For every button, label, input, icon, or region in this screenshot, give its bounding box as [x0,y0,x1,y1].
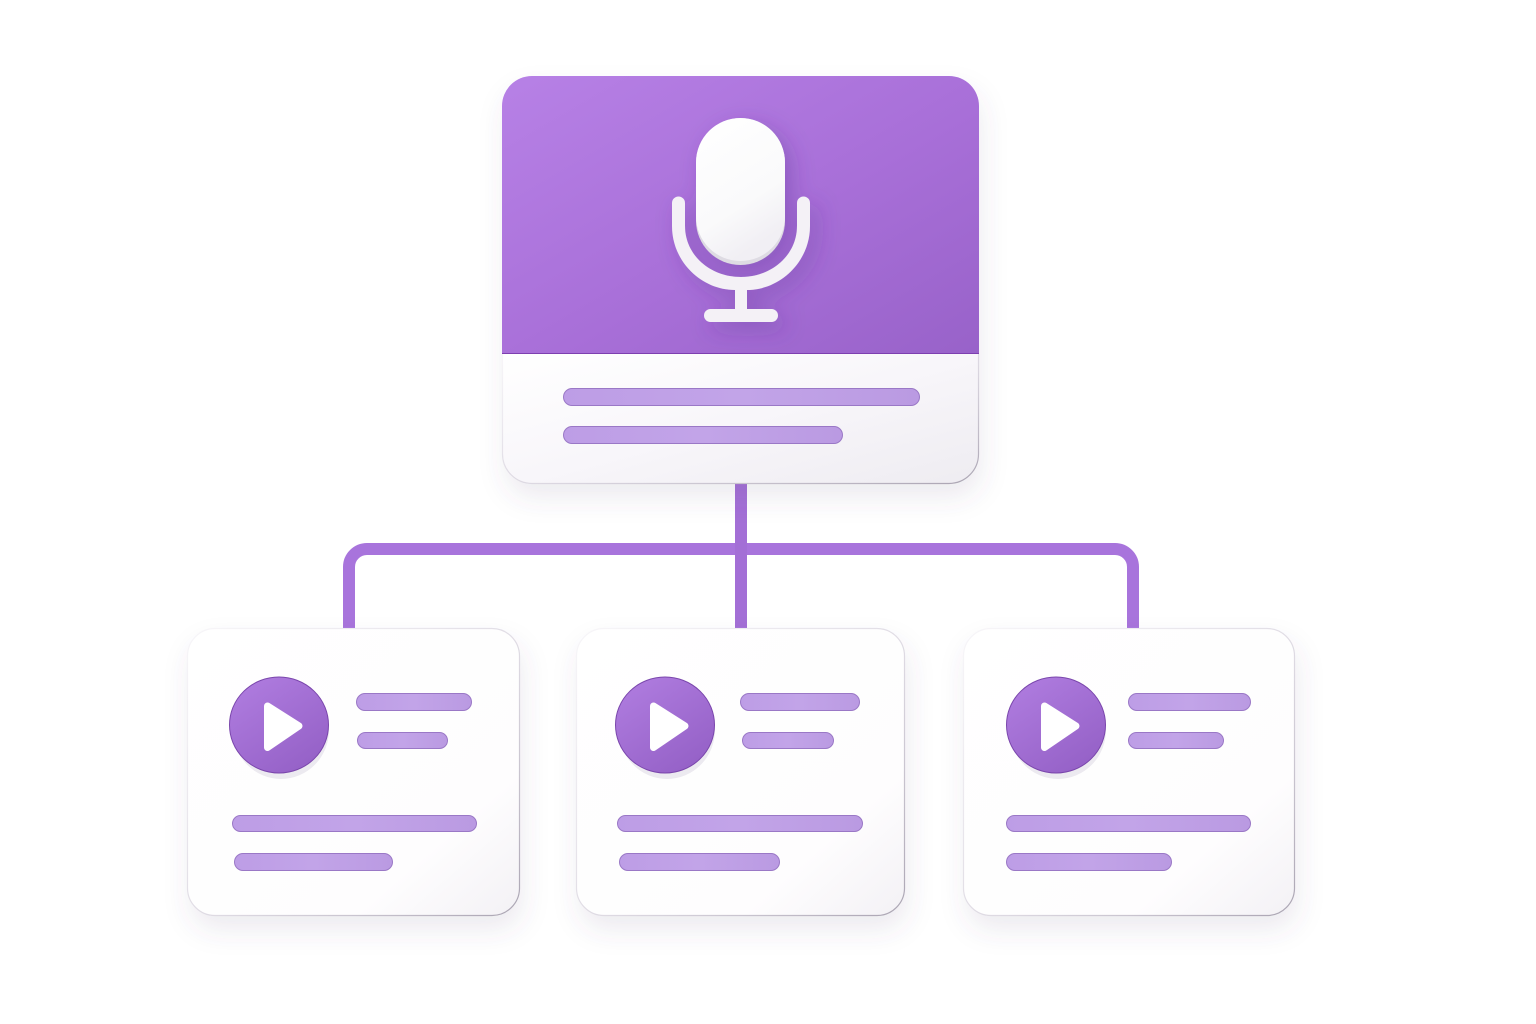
icon: play button [230,677,329,779]
icon: play button [1006,677,1106,779]
panel: main podcast card [502,76,979,484]
panel: episode card 2 [576,628,905,916]
connector lines [349,484,1133,628]
text placeholder bar [232,816,476,832]
text placeholder bar [618,816,862,832]
text placeholder bar [564,426,842,444]
text placeholder bar [620,854,780,870]
icon: microphone [672,118,810,322]
text placeholder bar [358,732,448,748]
infographic canvas [186,76,1300,932]
text placeholder bar [1006,816,1250,832]
text placeholder bar [740,694,860,710]
text placeholder bar [234,854,392,870]
panel: episode card 1 [187,628,520,916]
text placeholder bar [1128,694,1250,710]
text placeholder bar [564,388,920,406]
card footer [502,354,979,484]
icon: play button [616,677,715,779]
card header [502,76,979,354]
text placeholder bar [742,732,834,748]
panel: episode card 3 [963,628,1295,916]
text placeholder bar [1006,854,1172,870]
text placeholder bar [1128,732,1224,748]
text placeholder bar [356,694,472,710]
